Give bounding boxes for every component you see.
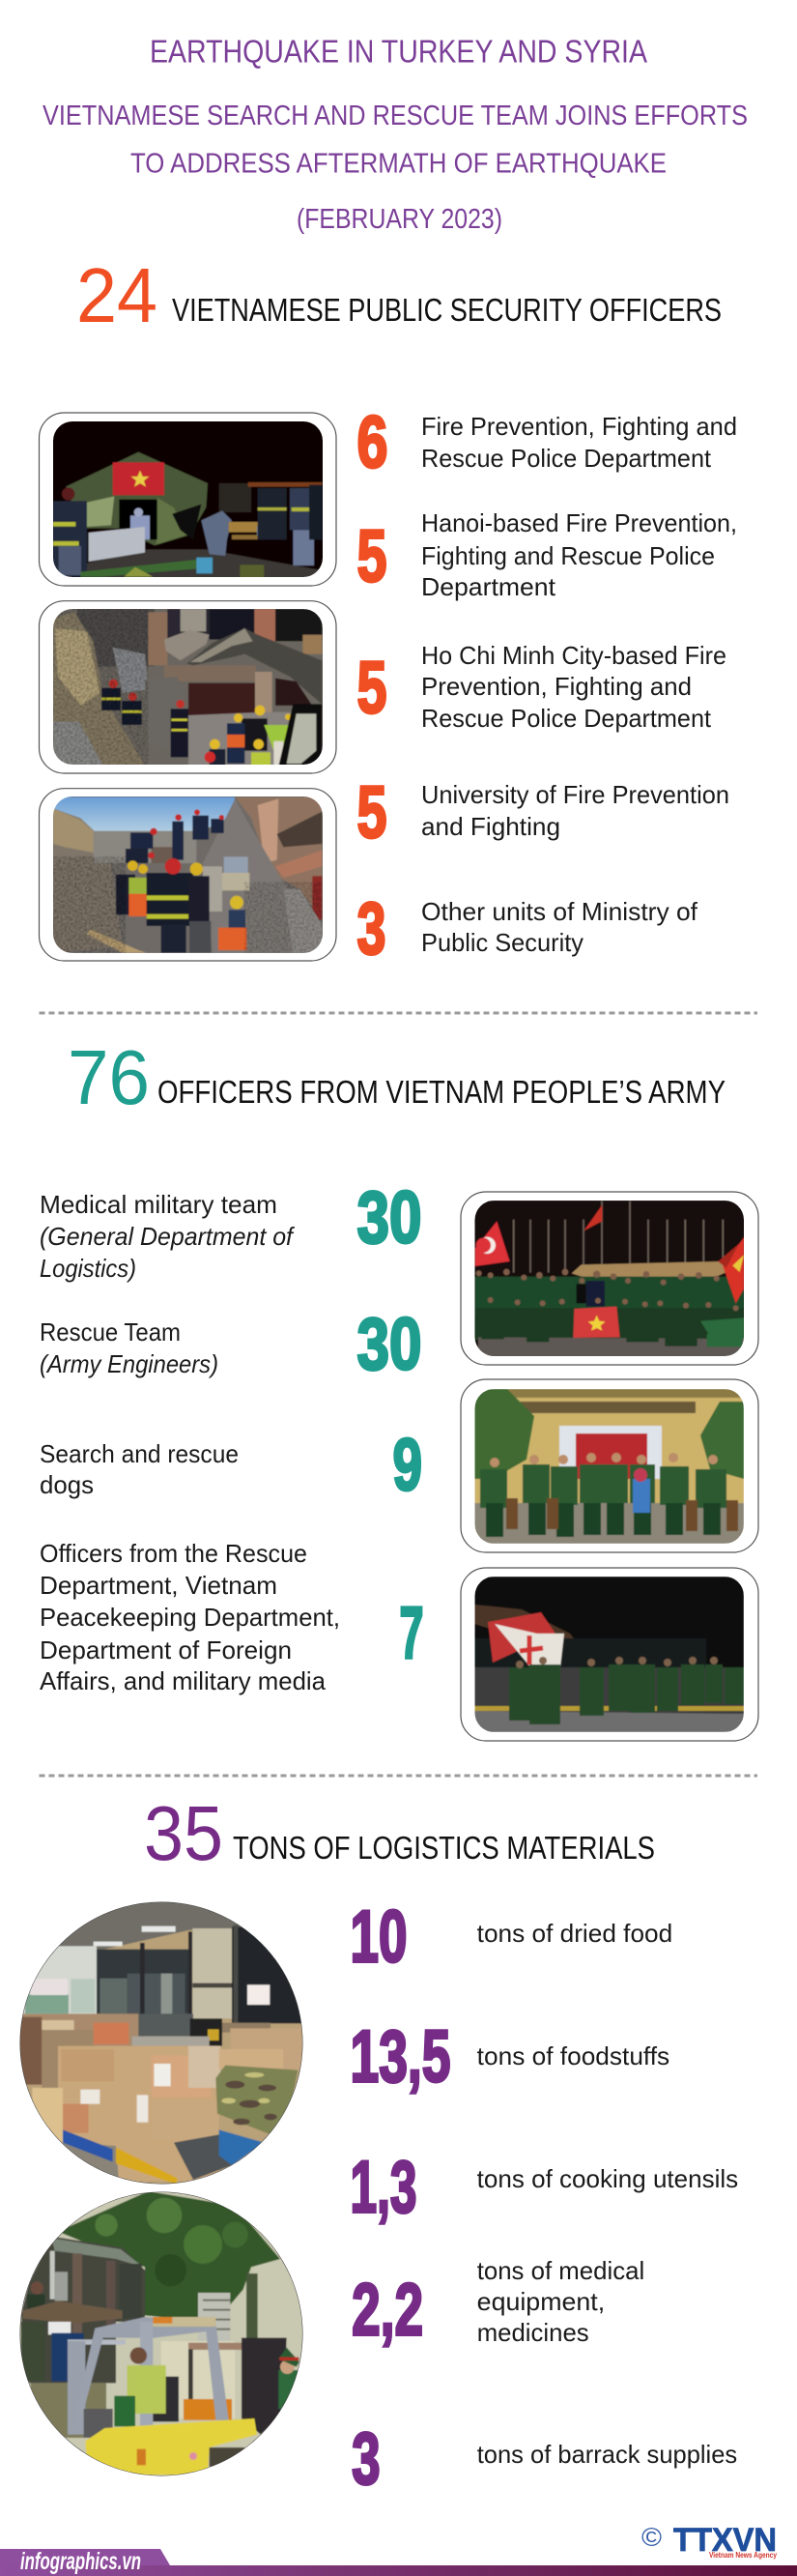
text: Hanoi department: Department	[421, 572, 556, 601]
number 10: 10	[350, 1896, 408, 1978]
text: dried food: tons of dried food	[477, 1919, 672, 1948]
number 3 barrack: 3	[352, 2418, 381, 2500]
number 3: 3	[357, 887, 386, 970]
number 6: 6	[357, 402, 388, 483]
text: medical military team: Logistics)	[40, 1254, 136, 1283]
text: fire prevention department: Rescue Police Department	[421, 444, 712, 473]
list: army units	[40, 1177, 423, 1695]
text: university: University of Fire Prevention	[421, 780, 729, 809]
text: Ho Chi Minh City department	[421, 641, 726, 733]
text: fire prevention department	[421, 412, 737, 473]
text: Hanoi department	[421, 508, 737, 601]
text: rescue team: Rescue Team	[40, 1317, 181, 1346]
heading: 76 officers	[68, 1034, 726, 1120]
text: medical military team: Medical military team	[40, 1190, 277, 1219]
text: fire prevention department: Fire Prevention, Fighting and	[421, 412, 737, 441]
number 2,2: 2,2	[352, 2270, 423, 2351]
text: university: and Fighting	[421, 812, 560, 841]
photo: soldiers marching at night with flag	[461, 1568, 758, 1741]
text: search and rescue dogs: Search and rescue	[40, 1439, 239, 1468]
number 30 rescue: 30	[357, 1303, 421, 1386]
text: cooking utensils: tons of cooking utensils	[477, 2164, 738, 2193]
text: other units: Other units of Ministry of	[421, 897, 698, 926]
photo: warehouse with boxes	[19, 1901, 302, 2185]
text: other officers: Affairs, and military media	[40, 1666, 327, 1695]
text: Ho Chi Minh City department: Prevention, Fighting and	[421, 672, 692, 701]
heading: 35 tons: TONS OF LOGISTICS MATERIALS	[233, 1830, 655, 1866]
number 7: 7	[400, 1593, 423, 1674]
text: medical equipment: tons of medical	[477, 2256, 644, 2285]
text: medical military team: (General Department of	[40, 1222, 296, 1251]
heading: 24 public security officers	[76, 252, 722, 338]
number 1,3: 1,3	[350, 2146, 417, 2229]
text: barrack supplies: tons of barrack supplies	[477, 2440, 737, 2469]
text: other officers: Department of Foreign	[40, 1635, 292, 1664]
photo: rescuers on rubble under blue sky	[39, 789, 336, 961]
text: other officers	[40, 1539, 340, 1695]
text: medical equipment	[477, 2256, 644, 2347]
text: medical military team	[40, 1190, 296, 1283]
text: search and rescue dogs	[40, 1439, 239, 1499]
photo: night tent with Vietnamese flag	[39, 413, 336, 586]
number 9: 9	[392, 1425, 422, 1506]
text: search and rescue dogs: dogs	[40, 1470, 94, 1499]
footer bar: infographics.vn	[20, 2548, 141, 2575]
photo: forklift and truck	[19, 2191, 302, 2476]
number 5 University: 5	[357, 771, 386, 854]
subtitle: TO ADDRESS AFTERMATH OF EARTHQUAKE	[130, 149, 667, 180]
title: (FEBRUARY 2023)	[297, 204, 502, 235]
heading: 76 officers: 76	[68, 1034, 150, 1120]
title: EARTHQUAKE IN TURKEY AND SYRIA	[150, 33, 647, 70]
text: Hanoi department: Fighting and Rescue Police	[421, 541, 715, 570]
title	[43, 33, 748, 235]
number 13,5: 13,5	[350, 2016, 450, 2098]
text: other officers: Peacekeeping Department,	[40, 1603, 340, 1632]
heading: 35 tons: 35	[144, 1790, 223, 1876]
text: other units: Public Security	[421, 928, 584, 957]
list: logistics materials	[350, 1896, 738, 2500]
number 30 medical: 30	[357, 1177, 421, 1259]
text: rescue team: (Army Engineers)	[40, 1349, 218, 1378]
logo: TTXVN: TTXVN	[673, 2522, 777, 2559]
photo: collapsed building and excavator	[39, 601, 336, 773]
text: medical equipment: equipment,	[477, 2287, 605, 2316]
text: Ho Chi Minh City department: Ho Chi Minh City-based Fire	[421, 641, 726, 670]
number 5 Ho Chi Minh City: 5	[357, 648, 386, 729]
text: Ho Chi Minh City department: Rescue Police Department	[421, 704, 712, 733]
text: university	[421, 780, 729, 841]
logo: TTXVN: Vietnam News Agency	[709, 2551, 777, 2560]
text: other units	[421, 897, 698, 957]
subtitle	[43, 101, 748, 180]
heading: 35 tons	[144, 1790, 655, 1876]
footer bar	[0, 2548, 797, 2576]
text: Hanoi department: Hanoi-based Fire Prevention,	[421, 508, 737, 537]
number 5 Hanoi: 5	[357, 516, 386, 597]
photo: soldiers at night with flags	[461, 1192, 758, 1365]
text: foodstuffs: tons of foodstuffs	[477, 2041, 669, 2070]
text: rescue team	[40, 1317, 218, 1378]
photo: soldiers with rescue dogs	[461, 1379, 758, 1552]
list: public security units	[357, 402, 737, 970]
text: other officers: Department, Vietnam	[40, 1571, 277, 1600]
text: other officers: Officers from the Rescue	[40, 1539, 307, 1568]
logo: TTXVN: ©	[641, 2523, 662, 2552]
text: medical equipment: medicines	[477, 2318, 589, 2347]
heading: 24 public security officers: 24	[76, 252, 157, 338]
